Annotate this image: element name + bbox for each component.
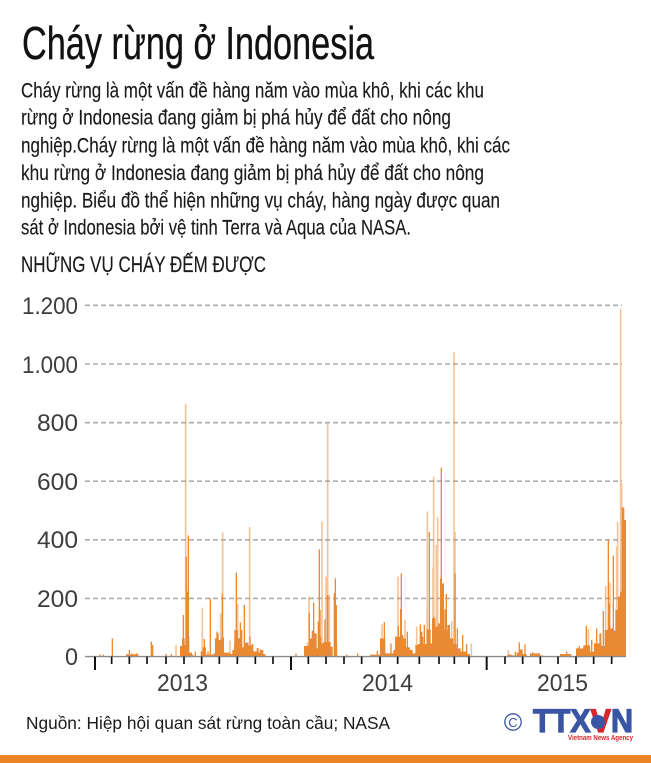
- intro text block: nghiệp.Cháy rừng là một vấn đề hàng năm vào mùa khô, khi các: [21, 133, 510, 157]
- x axis year labels: 2014: [362, 670, 413, 697]
- y axis labels: 200: [37, 586, 78, 613]
- copyright symbol: [505, 714, 521, 730]
- logo: TTXVN: Vietnam News Agency: [568, 735, 633, 742]
- bars: 2013 to mid 2014: [100, 404, 358, 657]
- x axis year labels: 2013: [157, 670, 208, 697]
- y axis labels: 600: [37, 469, 78, 496]
- chart heading: NHỮNG VỤ CHÁY ĐẾM ĐƯỢC: [21, 252, 266, 277]
- intro text block: khu rừng ở Indonesia đang giảm bị phá hủy để đất cho nông: [21, 161, 484, 185]
- intro text block: nghiệp. Biểu đồ thể hiện những vụ cháy, hàng ngày được quan: [21, 188, 500, 212]
- y axis labels: 1.000: [22, 352, 78, 379]
- intro text block: rừng ở Indonesia đang giảm bị phá hủy để đất cho nông: [21, 106, 451, 130]
- title: Cháy rừng ở Indonesia: [22, 17, 374, 69]
- intro text block: sát ở Indonesia bởi vệ tinh Terra và Aqua của NASA.: [21, 215, 411, 239]
- intro text block: Cháy rừng là một vấn đề hàng năm vào mùa khô, khi các khu: [21, 78, 484, 102]
- y axis labels: 400: [37, 527, 78, 554]
- x axis year labels: [157, 670, 588, 697]
- y axis labels: 0: [65, 644, 78, 671]
- x axis year labels: 2015: [537, 670, 588, 697]
- copyright symbol: C: [508, 715, 518, 730]
- bars: mid 2014 to 2015: [370, 309, 626, 657]
- y axis labels: 1.200: [22, 293, 78, 320]
- intro text block: [21, 78, 510, 239]
- y axis labels: [22, 293, 78, 671]
- source note: Nguồn: Hiệp hội quan sát rừng toàn cầu; NASA: [26, 713, 390, 733]
- y axis labels: 800: [37, 410, 78, 437]
- x axis baseline and ticks: [85, 657, 626, 670]
- bar chart: daily fire counts: [85, 305, 626, 670]
- logo: TTXVN: TTXVN: [533, 703, 633, 739]
- bottom orange band: [0, 755, 651, 763]
